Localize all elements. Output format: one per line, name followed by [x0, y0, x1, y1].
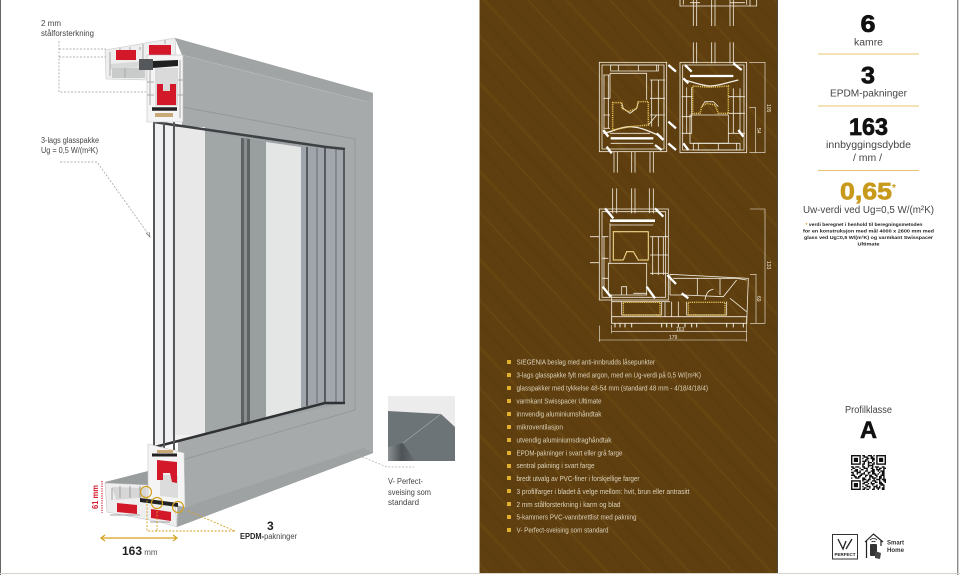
label: V-Perfect weld: standard [388, 498, 419, 507]
list bullets [507, 360, 511, 532]
dimension values: lower section: 179 [669, 335, 678, 341]
stat: 3 EPDM gaskets [830, 62, 908, 100]
dimension values: upper section: 105 [765, 104, 771, 113]
window glass opening [154, 122, 345, 447]
triple glazing panes [154, 118, 174, 450]
QR code [851, 456, 886, 489]
dimension arrow: 163 mm [101, 535, 177, 541]
feature list: glasspakker med tykkelse 48-54 mm (standard 48 mm - 4/18/4/18/4) [516, 386, 708, 392]
label: steel reinforcement: stålforsterkning [41, 29, 94, 38]
profile class [845, 405, 892, 444]
dimensions [599, 322, 747, 342]
feature list: EPDM-pakninger i svart eller grå farge [516, 450, 623, 458]
label: 3 EPDM gaskets [240, 519, 297, 541]
label: steel reinforcement: 2 mm [41, 19, 61, 28]
feature list [507, 358, 708, 534]
stat: 163 mm depth: 163 [849, 114, 888, 141]
label: triple glazing: 3-lags glasspakke [41, 136, 99, 145]
label: V-Perfect weld: V- Perfect- [388, 477, 423, 486]
stat: 3 EPDM gaskets: 3 [861, 62, 875, 90]
gasket dashed leader lines [147, 497, 235, 531]
icon: smart home [865, 534, 883, 559]
stat: 6 chambers: kamre [854, 38, 883, 48]
gasket highlight circles [140, 486, 184, 512]
panel: window cross-section illustration [41, 19, 455, 558]
stat: 163 mm depth: / mm / [853, 153, 882, 164]
badge: V Perfect [832, 534, 858, 559]
feature list: 5-kammers PVC-vannbrettlist med pakning [516, 514, 637, 522]
footnote: Ultimate [858, 242, 880, 248]
panel: brown technical panel [479, 0, 778, 573]
technical drawing: lower section [590, 188, 765, 342]
profile class: Profilklasse [845, 405, 892, 416]
reinforcement dots: upper section [613, 86, 728, 130]
dimension marker: 61 mm [91, 481, 102, 513]
dimension values: lower section: 133 [765, 261, 771, 270]
panel: key figures [803, 11, 934, 559]
profile class: A [860, 417, 877, 444]
dimension values: upper section [755, 104, 771, 134]
feature list: 3 profilfarger i bladet å velge mellom: hvit, brun eller antrasitt [516, 488, 690, 496]
bottom profile section [105, 444, 185, 527]
stat: 163 mm depth: innbyggingsdybde [826, 140, 911, 151]
stat: Uw value 0,65: 0,65 [840, 178, 892, 206]
dimension values: upper section: 54 [755, 128, 761, 134]
leader: triple glazing [60, 162, 150, 237]
label: 3 EPDM gaskets: 3 [267, 519, 274, 533]
reinforcement dots: lower section [613, 232, 725, 315]
feature list: SIEGENIA beslag med anti-innbrudds låsepunkter [516, 358, 656, 366]
stat: Uw value 0,65 [803, 178, 934, 216]
technical drawing: upper section [599, 0, 765, 173]
feature list: 3-lags glasspakke fylt med argon, med en Ug-verdi på 0,5 W/(m²K) [516, 372, 701, 380]
label: steel reinforcement [41, 19, 94, 38]
feature list: sentral pakning i svart farge [516, 463, 595, 470]
label: 3 EPDM gaskets: EPDM-pakninger [240, 532, 297, 541]
feature list: utvendig aluminiumsdraghåndtak [516, 436, 612, 444]
feature list: varmkant Swisspacer Ultimate [516, 398, 602, 406]
stat: 163 mm depth [826, 114, 911, 164]
footnote: glass ved Ug=0,5 W/(m²K) og varmkant Swisspacer [804, 235, 933, 241]
stat: 6 chambers [854, 11, 883, 48]
stat: 3 EPDM gaskets: EPDM-pakninger [830, 88, 908, 100]
footnote: for en konstruksjon med mål 4000 x 2600 mm med [803, 228, 934, 234]
badge: V Perfect: PERFECT [834, 552, 856, 557]
label: Smart Home [887, 540, 905, 554]
label: Smart Home: Home [887, 548, 905, 554]
left section [599, 62, 667, 152]
window frame face [175, 38, 373, 527]
stat: Uw value 0,65: Uw-verdi ved Ug=0,5 W/(m²K) [803, 205, 934, 216]
dimensions [749, 62, 765, 153]
footnote [803, 222, 934, 248]
dimension values: lower section: 163 [676, 327, 685, 333]
feature list: 2 mm stålforsterkning i karm og blad [516, 501, 621, 509]
feature list: V- Perfect-sveising som standard [516, 528, 609, 534]
label: triple glazing: Ug = 0,5 W/(m²K) [41, 146, 98, 155]
label: V-Perfect weld [388, 477, 431, 507]
label: Smart Home: Smart [887, 540, 904, 546]
dimension marker: 61 mm: 61 mm [91, 485, 100, 509]
right section [680, 62, 747, 153]
feature list: bredt utvalg av PVC-finer i forskjellige farger [516, 476, 640, 483]
stat: Uw value 0,65: * [892, 183, 896, 194]
leader: V-Perfect weld [333, 445, 414, 467]
label: triple glazing [41, 136, 99, 155]
footnote: * verdi beregnet i henhold til beregningsmetoden [806, 222, 923, 228]
dimension values: lower section: 69 [755, 296, 761, 302]
label: V-Perfect weld: sveising som [388, 488, 431, 497]
feature list: mikroventilasjon [516, 424, 563, 432]
dimension values: lower section [669, 261, 771, 341]
feature list: innvendig aluminiumshåndtak [516, 410, 602, 418]
label: 163 mm: 163 mm [122, 544, 158, 558]
leader: steel reinforcement [59, 41, 146, 92]
photo: V-Perfect weld corner [388, 396, 455, 461]
top profile section [105, 38, 183, 122]
stat: 6 chambers: 6 [860, 11, 876, 38]
